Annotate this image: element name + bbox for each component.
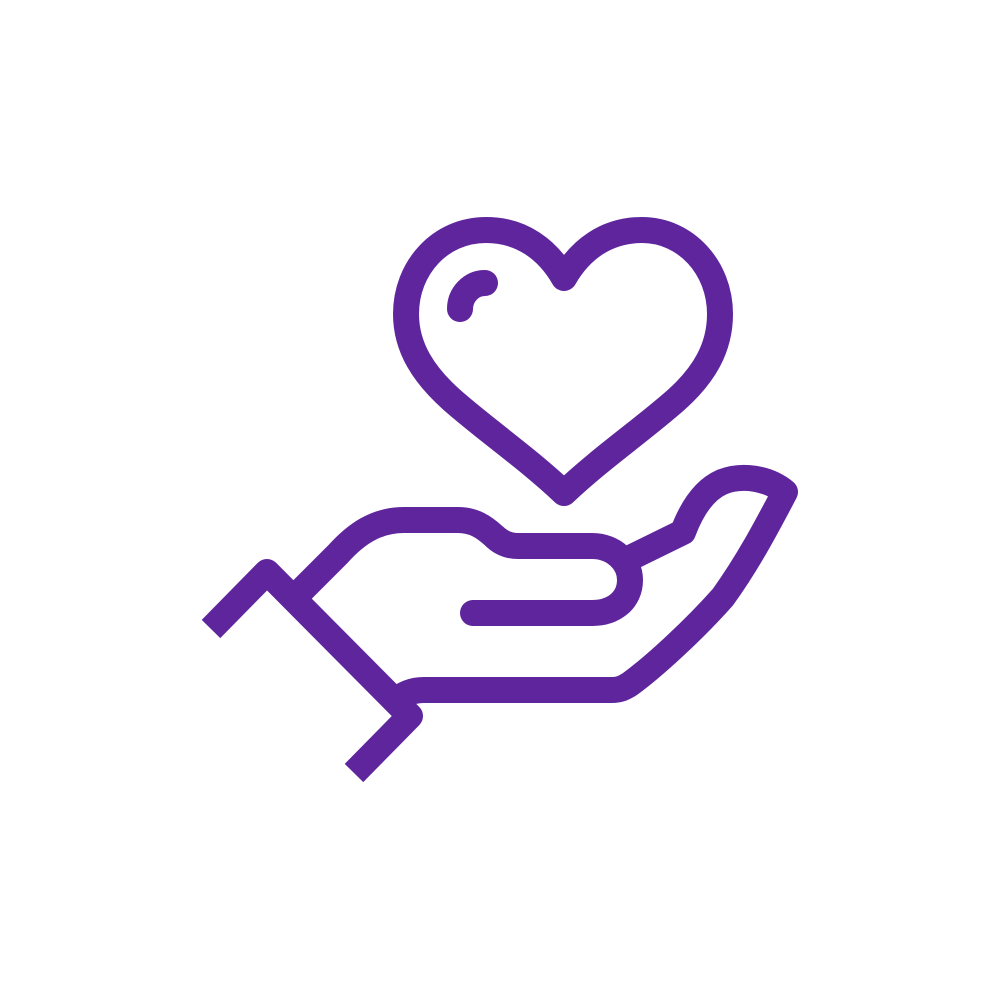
icon: heart outline	[406, 230, 720, 493]
icon: thumb and lower palm	[396, 478, 785, 700]
icon: hand	[211, 478, 785, 773]
icon: heart highlight	[460, 283, 485, 309]
icon: palm and fingers	[302, 520, 630, 613]
icon: sleeve cuff	[211, 572, 410, 773]
